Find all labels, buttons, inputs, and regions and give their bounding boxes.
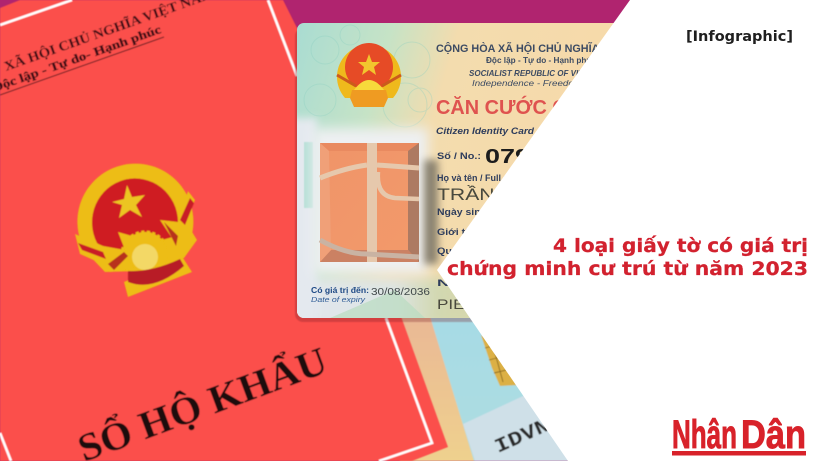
card number and name: PIER [437, 296, 477, 312]
logo: Nhân Dân: Nhân [672, 413, 737, 457]
star [112, 185, 145, 218]
ribbon and tail [124, 258, 192, 297]
card header text: Independence - Freedom [472, 79, 582, 88]
chip [481, 335, 518, 386]
title: 4 loại giấy tờ có giá trị [553, 234, 808, 257]
card header text: CỘNG HÒA XÃ HỘI CHỦ NGHĨA VIỆT [436, 42, 626, 55]
card number and name [437, 146, 545, 312]
portrait with watermark [320, 143, 419, 262]
card title: CĂN CƯỚC CÔNG [436, 95, 612, 119]
card fields: Giới tính [437, 227, 481, 237]
card fields: Ngày sinh [437, 207, 487, 217]
card number and name: TRẦN T [437, 185, 513, 204]
card header text: Độc lập - Tự do - Hạnh phúc [486, 56, 597, 65]
card header text [436, 42, 626, 88]
logo: Nhân Dân: Dân [741, 413, 806, 457]
card fields [436, 126, 535, 288]
title: chứng minh cư trú từ năm 2023 [447, 258, 808, 280]
card fields: Họ và tên / Full name [437, 173, 527, 183]
guilloche pattern [304, 25, 432, 127]
citizen identity card [297, 23, 614, 318]
title [447, 234, 808, 280]
national emblem on book [75, 164, 197, 297]
shadow under ID card [295, 28, 635, 322]
expiry date [311, 286, 430, 304]
back card: tan page edge and blue card [395, 300, 640, 461]
card fields: Quê quán [437, 246, 487, 256]
expiry date: Có giá trị đến: [311, 286, 369, 295]
expiry date: Date of expiry [311, 297, 366, 304]
card fields: Citizen Identity Card [436, 126, 535, 136]
card header text: SOCIALIST REPUBLIC OF VIET NAM [469, 68, 610, 78]
photo glow [312, 128, 428, 274]
wheat left [75, 232, 134, 272]
red household book [0, 0, 448, 461]
card fields: Nơi [437, 278, 467, 288]
card emblem [337, 43, 401, 107]
card code: IDVN [491, 415, 554, 459]
wheat right [160, 191, 197, 264]
card fields: Số / No.: [437, 151, 481, 161]
white panel [437, 0, 820, 461]
lower pale band of the blue card [463, 396, 640, 461]
cogwheel [122, 232, 168, 278]
lower card tint [285, 118, 640, 328]
gold ring [77, 164, 193, 272]
white frame lines [0, 0, 72, 25]
label: Infographic: [Infographic] [686, 29, 793, 45]
expiry date: 30/08/2036 [371, 286, 430, 298]
card number and name: 0790 [485, 146, 545, 168]
red disc [92, 178, 178, 252]
